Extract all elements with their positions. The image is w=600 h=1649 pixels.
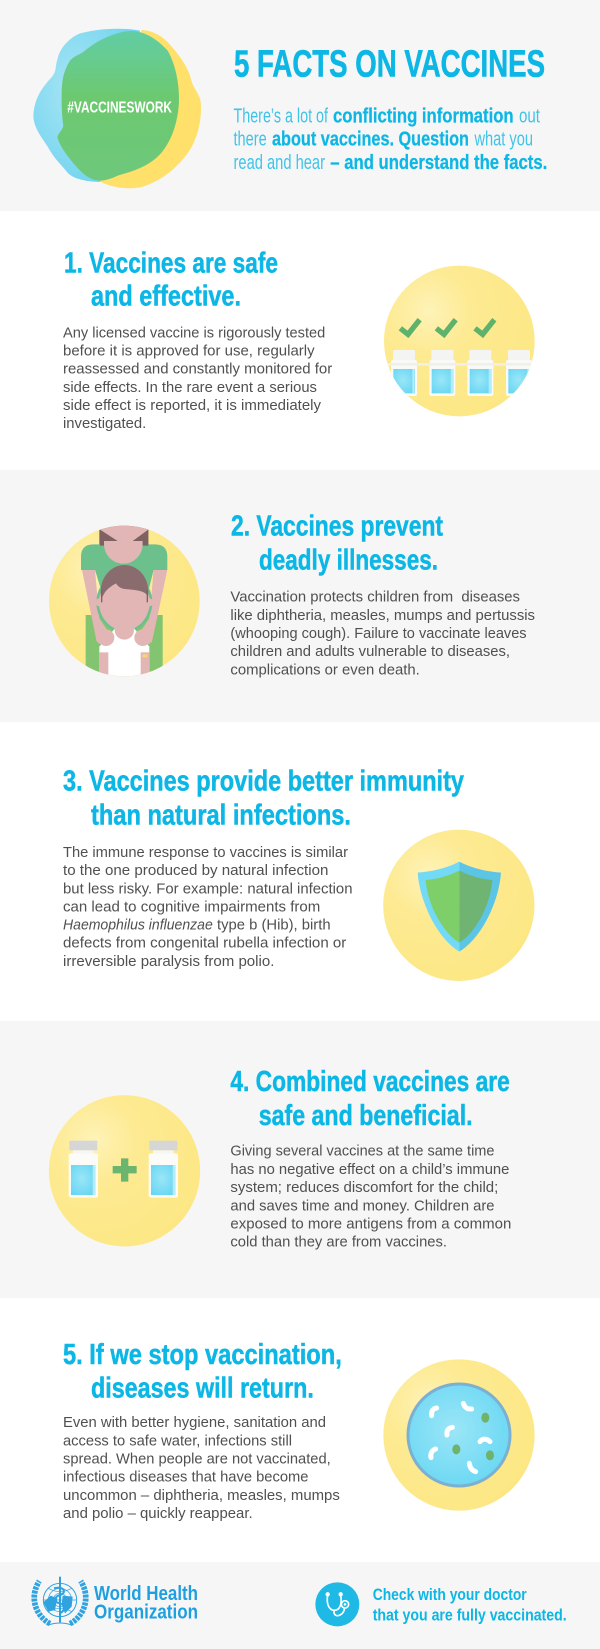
body text: fact 1: investigated. bbox=[63, 416, 146, 432]
icon: vials with check marks bbox=[382, 266, 538, 416]
heading: fact 5: 5. If we stop vaccination, bbox=[63, 1339, 342, 1371]
body text: fact 3: type b (Hib), birth bbox=[217, 918, 331, 934]
logo: WHO emblem bbox=[34, 1577, 86, 1625]
body text: fact 5: access to safe water, infections still bbox=[63, 1433, 292, 1449]
intro text: There’s a lot of bbox=[234, 105, 328, 127]
intro text: read and hear bbox=[234, 152, 325, 174]
heading: fact 4: safe and beneficial. bbox=[259, 1100, 473, 1132]
callout: check with your doctor: that you are fully vaccinated. bbox=[373, 1606, 567, 1625]
body text: fact 4: has no negative effect on a child’s immune bbox=[230, 1162, 509, 1178]
body text: fact 3: but less risky. For example: natural infection bbox=[63, 881, 352, 897]
body text: fact 5: uncommon – diphtheria, measles, mumps bbox=[63, 1488, 340, 1504]
body text: fact 5: spread. When people are not vaccinated, bbox=[63, 1451, 331, 1467]
body text: fact 3: can lead to cognitive impairments from bbox=[63, 899, 320, 915]
body text: fact 2: Vaccination protects children from diseases bbox=[230, 590, 520, 606]
intro text: conflicting information bbox=[333, 105, 514, 127]
callout: check with your doctor bbox=[373, 1585, 567, 1625]
intro text: about vaccines. Question bbox=[272, 129, 469, 151]
body text: fact 2: like diphtheria, measles, mumps and pertussis bbox=[230, 608, 535, 624]
intro text: out bbox=[519, 105, 540, 127]
icon: shield bbox=[383, 830, 534, 981]
heading: fact 5 bbox=[63, 1339, 342, 1404]
body text: fact 3: Haemophilus influenzae bbox=[63, 918, 213, 934]
panel: fact 3 bbox=[0, 722, 600, 1021]
icon: parent and child bbox=[49, 524, 200, 682]
heading: fact 2 bbox=[231, 511, 443, 576]
callout: check with your doctor: Check with your doctor bbox=[373, 1585, 527, 1604]
body text: fact 2: (whooping cough). Failure to vaccinate leaves bbox=[230, 626, 527, 642]
body text: fact 5: and polio – quickly reappear. bbox=[63, 1506, 253, 1522]
body text: fact 1: reassessed and constantly monitored for bbox=[63, 362, 332, 378]
heading: fact 3 bbox=[63, 766, 464, 831]
body text: fact 1 bbox=[63, 326, 332, 432]
body text: fact 5: Even with better hygiene, sanitation and bbox=[63, 1415, 326, 1431]
intro text: what you bbox=[474, 129, 533, 151]
intro text: there bbox=[234, 129, 267, 151]
body text: fact 1: before it is approved for use, regularly bbox=[63, 344, 315, 360]
body text: fact 5: infectious diseases that have become bbox=[63, 1469, 308, 1485]
heading: fact 1: 1. Vaccines are safe bbox=[64, 247, 278, 279]
panel: fact 5 bbox=[0, 1298, 600, 1562]
heading: fact 4 bbox=[230, 1066, 510, 1132]
panel: fact 4 bbox=[0, 1021, 600, 1298]
panel: header bbox=[0, 0, 600, 211]
heading: fact 4: 4. Combined vaccines are bbox=[230, 1066, 510, 1098]
body text: fact 4 bbox=[230, 1144, 511, 1250]
body text: fact 3: defects from congenital rubella infection or bbox=[63, 936, 347, 952]
body text: fact 5 bbox=[63, 1415, 340, 1522]
heading: fact 3: 3. Vaccines provide better immunity bbox=[63, 766, 464, 798]
heading: fact 1: and effective. bbox=[91, 281, 241, 313]
logo text: World Health Organization: World Health bbox=[94, 1583, 198, 1605]
heading: fact 3: than natural infections. bbox=[91, 799, 351, 831]
heading: fact 5: diseases will return. bbox=[91, 1372, 314, 1404]
body text: fact 4: cold than they are from vaccines. bbox=[230, 1234, 447, 1250]
body text: fact 3: to the one produced by natural infection bbox=[63, 863, 328, 879]
body text: fact 1: side effect is reported, it is immediately bbox=[63, 398, 322, 414]
body text: fact 3 bbox=[63, 845, 352, 970]
icon: petri dish bbox=[383, 1359, 535, 1511]
icon: stethoscope bbox=[315, 1582, 359, 1626]
logo text: World Health Organization bbox=[94, 1583, 198, 1624]
body text: fact 2: children and adults vulnerable to diseases, bbox=[230, 644, 510, 660]
body text: fact 4: and saves time and money. Children are bbox=[230, 1198, 494, 1214]
intro text: – and understand the facts. bbox=[330, 152, 547, 174]
intro text bbox=[234, 105, 547, 174]
body text: fact 3: The immune response to vaccines is similar bbox=[63, 845, 348, 861]
heading: fact 1 bbox=[64, 247, 278, 313]
logo text: World Health Organization: Organization bbox=[94, 1602, 198, 1624]
body text: fact 2 bbox=[230, 590, 535, 678]
body text: fact 1: side effects. In the rare event a serious bbox=[63, 380, 317, 396]
body text: fact 3: irreversible paralysis from polio. bbox=[63, 954, 274, 970]
heading: fact 2: 2. Vaccines prevent bbox=[231, 511, 443, 543]
panel: fact 2 bbox=[0, 470, 600, 722]
icon: two vials with plus bbox=[49, 1095, 200, 1246]
panel: footer bbox=[0, 1562, 600, 1649]
panel: fact 1 bbox=[63, 251, 535, 431]
hashtag label: #VACCINESWORK bbox=[67, 99, 172, 116]
body text: fact 2: complications or even death. bbox=[230, 662, 420, 678]
heading: fact 2: deadly illnesses. bbox=[259, 544, 438, 576]
body text: fact 4: system; reduces discomfort for the child; bbox=[230, 1180, 498, 1196]
body text: fact 4: exposed to more antigens from a common bbox=[230, 1216, 511, 1232]
icon: watercolour blob with hashtag bbox=[33, 29, 201, 188]
body text: fact 4: Giving several vaccines at the same time bbox=[230, 1144, 494, 1160]
body text: fact 1: Any licensed vaccine is rigorously tested bbox=[63, 326, 325, 342]
